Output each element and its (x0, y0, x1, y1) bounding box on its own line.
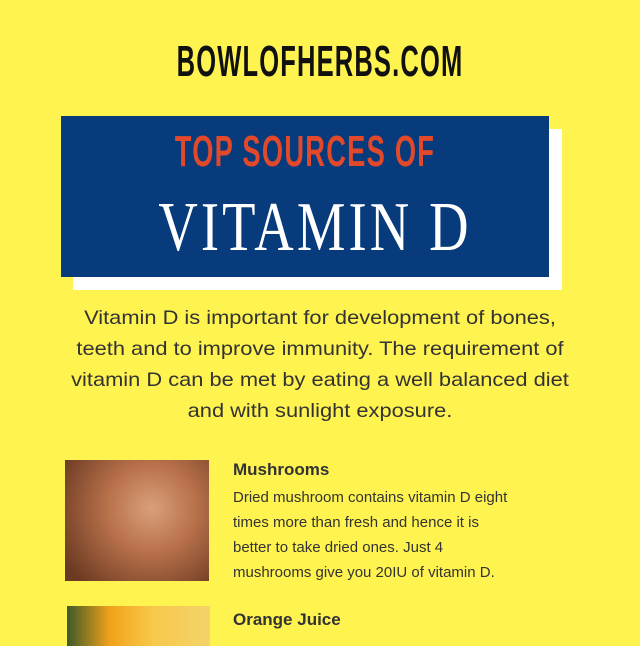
text: mushrooms (233, 489, 508, 581)
image: orange juice (67, 606, 210, 646)
title: site name: BOWLOFHERBS.COM (177, 37, 463, 86)
heading: top sources of: TOP SOURCES OF (175, 127, 435, 176)
intro text: vitamin D can be met by eating a well balanced diet (71, 369, 569, 391)
heading: vitamin d: VITAMIN D (158, 189, 472, 266)
text: mushrooms: times more than fresh and hence it is (233, 514, 479, 531)
item: mushrooms (65, 460, 508, 581)
item: orange juice (67, 606, 341, 646)
intro text (71, 307, 569, 422)
text: mushrooms: Dried mushroom contains vitamin D eight (233, 489, 507, 506)
intro text: teeth and to improve immunity. The requirement of (76, 338, 564, 360)
image: mushrooms (65, 460, 209, 581)
panel: title banner (61, 116, 549, 277)
text: mushrooms: better to take dried ones. Just 4 (233, 539, 443, 556)
text: mushrooms: mushrooms give you 20IU of vitamin D. (233, 564, 495, 581)
intro text: and with sunlight exposure. (188, 400, 452, 422)
heading: Orange Juice: Orange Juice (233, 610, 341, 629)
heading: Mushrooms: Mushrooms (233, 460, 329, 479)
white shadow box (73, 129, 562, 290)
intro text: Vitamin D is important for development of bones, (84, 307, 556, 329)
